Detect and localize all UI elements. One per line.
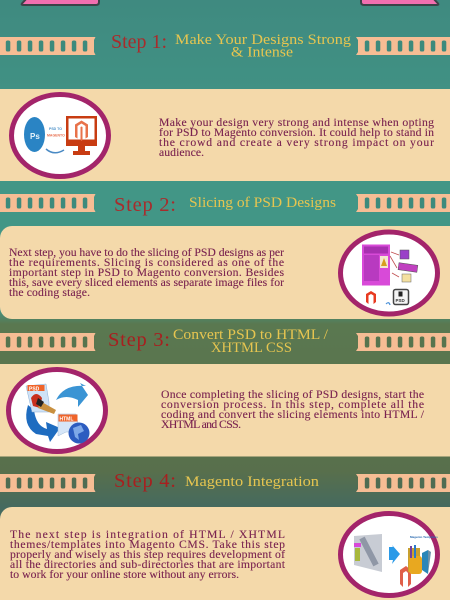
text: step 2 body: important step in PSD to Magento conversion. Besides xyxy=(9,266,284,279)
step 3 heading: XHTML CSS xyxy=(211,340,292,356)
text: step 3 body: conversion process. In this step, complete all the xyxy=(161,398,424,411)
icon: PSD to Magento xyxy=(12,94,108,176)
text: step 2 body: the coding stage. xyxy=(9,286,90,299)
step 4 heading: Magento Integration xyxy=(185,474,320,490)
top left pink banner xyxy=(22,0,99,5)
icon: PSD to HTML conversion: HTML xyxy=(60,416,73,422)
icon: PSD to Magento: PSD TO xyxy=(49,127,62,131)
panel: step 4 xyxy=(0,507,450,600)
step 4 heading: Step 4: xyxy=(114,470,176,492)
step 3 heading: Convert PSD to HTML / xyxy=(173,327,329,343)
text: step 4 body: to work for your online store without any errors. xyxy=(10,568,239,581)
icon: PSD to Magento: Ps xyxy=(30,132,40,141)
text: step 4 body: themes/templates into Magento CMS. Take this step xyxy=(10,538,285,551)
text: step 2 body xyxy=(9,246,284,299)
step 2 heading: Slicing of PSD Designs xyxy=(189,195,336,211)
step 1 heading: Make Your Designs Strong xyxy=(175,32,352,48)
icon: Magento integration xyxy=(340,514,438,596)
step 2 heading: Step 2: xyxy=(114,194,176,216)
text: step 2 body: Next step, you have to do the slicing of PSD designs as per xyxy=(9,246,284,259)
top right pink banner xyxy=(361,0,438,5)
panel: step 2 xyxy=(0,226,450,319)
text: step 1 body: the crowd and create a very strong impact on your xyxy=(159,136,434,149)
step 1 heading xyxy=(0,31,450,60)
icon: PSD to Magento: MAGENTO xyxy=(47,134,65,138)
icon: PSD to HTML conversion: PSD xyxy=(29,386,40,392)
step 4 heading xyxy=(0,470,450,492)
text: step 1 body: audience. xyxy=(159,146,204,159)
step 1 heading: Step 1: xyxy=(111,31,167,53)
text: step 2 body: this, save every sliced elements as separate image files for xyxy=(9,276,284,289)
panel: step 1 xyxy=(0,89,450,181)
step 1 heading: & Intense xyxy=(231,44,293,60)
icon: sliced design: PSD xyxy=(396,298,406,303)
step 2 heading xyxy=(0,194,450,216)
text: step 4 body xyxy=(10,528,286,581)
text: step 1 body: Make your design very strong and intense when opting xyxy=(159,116,434,129)
text: step 3 body: coding and convert the slicing elements into HTML / xyxy=(161,408,425,421)
text: step 4 body: The next step is integration of HTML / XHTML xyxy=(10,528,285,541)
icon: sliced design xyxy=(340,232,438,314)
text: step 3 body: XHTML and CSS. xyxy=(161,418,241,431)
text: step 1 body xyxy=(159,116,434,159)
panel: step 3 xyxy=(0,364,450,456)
step 3 heading: Step 3: xyxy=(108,329,170,351)
text: step 3 body: Once completing the slicing of PSD designs, start the xyxy=(161,388,424,401)
icon: Magento integration: Magento Templates xyxy=(410,535,438,539)
text: step 3 body xyxy=(161,388,425,431)
text: step 4 body: all the directories and sub-directories that are important xyxy=(10,558,286,571)
text: step 1 body: for PSD to Magento conversion. It could help to stand in xyxy=(159,126,434,139)
step 3 heading xyxy=(0,327,450,356)
text: step 4 body: properly and wisely as this step requires development of xyxy=(10,548,285,561)
icon: PSD to HTML conversion xyxy=(8,370,106,452)
text: step 2 body: the requirements. Slicing is considered as one of the xyxy=(9,256,284,269)
